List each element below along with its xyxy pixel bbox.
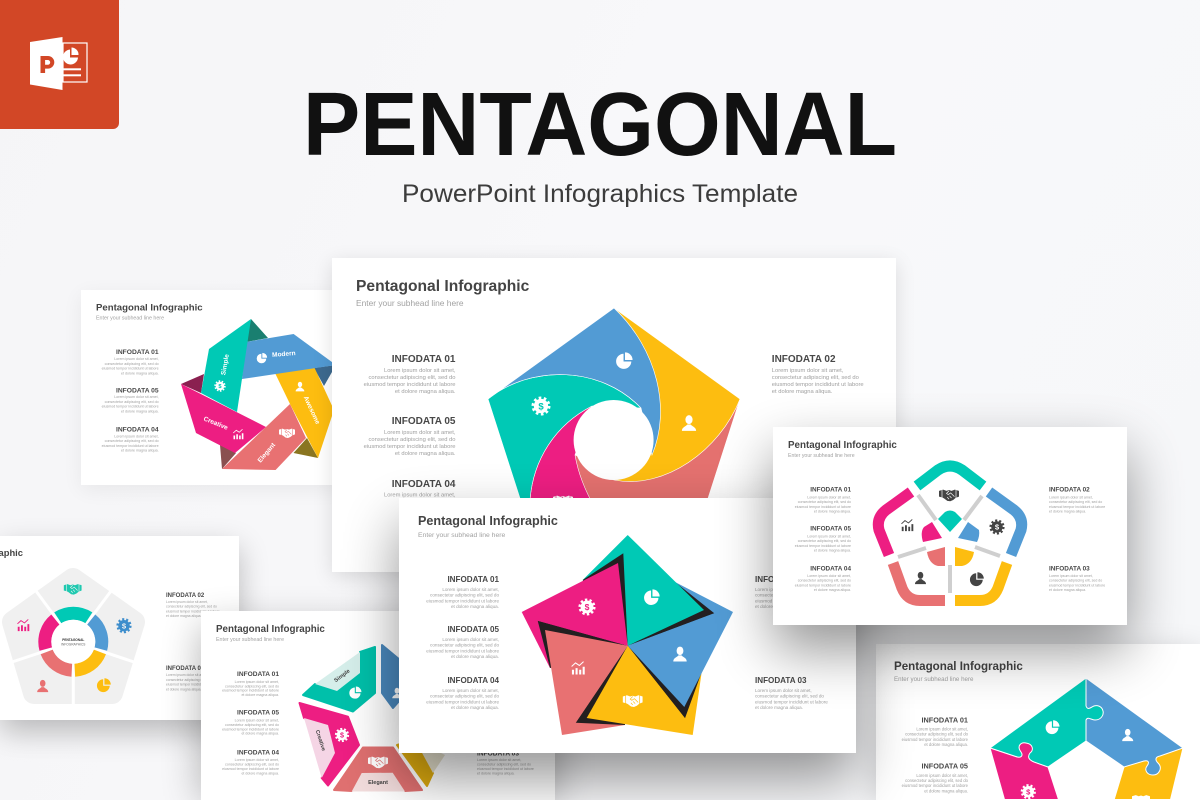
text block: infodata 05: Lorem ipsum dolor sit amet, bbox=[916, 773, 968, 778]
text block: infodata 05: eiusmod tempor incididunt ut labore bbox=[364, 444, 456, 450]
text block: infodata 05: consectetur adipiscing elit, sed do bbox=[368, 437, 456, 443]
text block: infodata 05: INFODATA 05 bbox=[392, 416, 456, 427]
text block: infodata 01: INFODATA 01 bbox=[116, 349, 159, 356]
text block: infodata 02: consectetur adipiscing elit, sed do bbox=[1049, 500, 1102, 504]
text block: infodata 03: INFODATA 03 bbox=[166, 666, 205, 672]
text block: infodata 01: et dolore magna aliqua. bbox=[241, 693, 279, 697]
text block: infodata 01 bbox=[426, 575, 499, 609]
text block: infodata 03: eiusmod tempor incididunt ut labore bbox=[166, 683, 220, 687]
text block: infodata 05 bbox=[902, 762, 969, 793]
text block: infodata 05 bbox=[426, 625, 499, 659]
chart: donut pentagon: PENTAGONAL bbox=[62, 638, 84, 642]
text block: infodata 05: Lorem ipsum dolor sit amet, bbox=[384, 430, 456, 436]
text block: infodata 01: INFODATA 01 bbox=[392, 354, 456, 365]
text block: infodata 04: Lorem ipsum dolor sit amet, bbox=[442, 688, 499, 693]
text block: infodata 01 bbox=[222, 671, 279, 697]
slide heading: Enter your subhead line here bbox=[894, 676, 974, 683]
chart: pentagon tabs: Simple bbox=[333, 668, 351, 684]
text block: infodata 05: INFODATA 05 bbox=[447, 625, 499, 634]
slide heading: Pentagonal Infographic bbox=[894, 660, 1023, 673]
slide heading: Enter your subhead line here bbox=[216, 637, 284, 643]
text block: infodata 02 bbox=[772, 354, 864, 395]
text block: infodata 02: INFODATA 02 bbox=[166, 593, 205, 599]
text block: infodata 03: et dolore magna aliqua. bbox=[1049, 588, 1086, 592]
text block: infodata 03: consectetur adipiscing elit, sed do bbox=[1049, 579, 1102, 583]
panel: ribbon star slide bbox=[81, 290, 341, 485]
text block: infodata 04: INFODATA 04 bbox=[810, 565, 851, 572]
text block: infodata 05: consectetur adipiscing elit, sed do bbox=[105, 400, 159, 404]
text block: infodata 03: INFODATA 03 bbox=[755, 676, 807, 685]
text block: infodata 03 bbox=[1049, 565, 1105, 592]
text block: infodata 04: eiusmod tempor incididunt ut labore bbox=[222, 767, 279, 771]
chart: ribbon star bbox=[181, 319, 336, 470]
text block: infodata 01: Lorem ipsum dolor sit amet, bbox=[442, 587, 499, 592]
text block: infodata 04: et dolore magna aliqua. bbox=[121, 449, 159, 453]
slide heading bbox=[894, 660, 1023, 683]
logo: PowerPoint badge bbox=[0, 0, 119, 129]
text block: infodata 05: Lorem ipsum dolor sit amet, bbox=[114, 395, 159, 399]
text block: infodata 04: eiusmod tempor incididunt ut labore bbox=[426, 699, 499, 704]
chart: swirl pentagon bbox=[488, 308, 740, 548]
text block: infodata 04: Lorem ipsum dolor sit amet, bbox=[807, 574, 851, 578]
text block: infodata 03: Lorem ipsum dolor sit amet, bbox=[477, 758, 521, 762]
text block: infodata 04: consectetur adipiscing elit, sed do bbox=[225, 763, 279, 767]
slide heading bbox=[216, 624, 325, 643]
text block: infodata 04: Lorem ipsum dolor sit amet, bbox=[384, 492, 456, 498]
text block: infodata 04: Lorem ipsum dolor sit amet, bbox=[235, 758, 279, 762]
text block: infodata 01: eiusmod tempor incididunt ut labore bbox=[795, 505, 851, 509]
text block: infodata 05 bbox=[364, 416, 456, 457]
text block: infodata 01: et dolore magna aliqua. bbox=[814, 510, 851, 514]
text block: infodata 02: eiusmod tempor incididunt ut labore bbox=[755, 598, 828, 603]
chart: pentagon tabs bbox=[300, 645, 445, 792]
slide heading: Enter your subhead line here bbox=[96, 316, 164, 322]
slide heading: Pentagonal Infographic bbox=[216, 624, 325, 635]
text block: infodata 04: eiusmod tempor incididunt ut labore bbox=[102, 444, 159, 448]
text block: infodata 05: eiusmod tempor incididunt ut labore bbox=[795, 544, 851, 548]
text block: infodata 01: Lorem ipsum dolor sit amet, bbox=[916, 726, 968, 732]
panel: puzzle pentagon slide bbox=[876, 644, 1200, 800]
panel: segmented ring slide bbox=[773, 427, 1127, 625]
chart: pinwheel pentagon bbox=[522, 535, 733, 735]
text block: infodata 03: consectetur adipiscing elit, sed do bbox=[166, 678, 217, 682]
text block: infodata 02: Lorem ipsum dolor sit amet, bbox=[1049, 496, 1093, 500]
panel: donut pentagon slide bbox=[0, 536, 239, 720]
text block: infodata 01: eiusmod tempor incididunt ut labore bbox=[364, 382, 456, 388]
text block: infodata 04 bbox=[102, 426, 159, 453]
text block: infodata 01: eiusmod tempor incididunt ut labore bbox=[222, 689, 279, 693]
text block: infodata 03 bbox=[477, 750, 534, 775]
text block: infodata 03 bbox=[166, 666, 220, 691]
text block: infodata 05: et dolore magna aliqua. bbox=[121, 409, 159, 413]
text block: infodata 01: INFODATA 01 bbox=[810, 487, 851, 494]
text block: infodata 02: consectetur adipiscing elit, sed do bbox=[772, 375, 859, 381]
text block: infodata 04: consectetur adipiscing elit, sed do bbox=[430, 694, 499, 699]
text block: infodata 02: INFODATA 02 bbox=[772, 354, 836, 365]
text block: infodata 01: Lorem ipsum dolor sit amet, bbox=[807, 496, 851, 500]
text block: infodata 05: Lorem ipsum dolor sit amet, bbox=[442, 637, 499, 642]
text block: infodata 03: et dolore magna aliqua. bbox=[166, 687, 201, 691]
text block: infodata 03: et dolore magna aliqua. bbox=[755, 705, 803, 710]
text block: infodata 01: et dolore magna aliqua. bbox=[121, 371, 159, 375]
text block: infodata 05: et dolore magna aliqua. bbox=[924, 788, 968, 793]
chart: ribbon star: Creative bbox=[202, 416, 229, 432]
chart: ribbon star: Simple bbox=[220, 353, 231, 376]
text block: infodata 05: consectetur adipiscing elit, sed do bbox=[225, 723, 279, 727]
slide heading bbox=[418, 514, 558, 539]
text block: infodata 01: Lorem ipsum dolor sit amet, bbox=[235, 680, 279, 684]
text block: infodata 02: Lorem ipsum dolor sit amet, bbox=[772, 368, 844, 374]
text block: infodata 03: consectetur adipiscing elit, sed do bbox=[755, 694, 824, 699]
chart: ribbon star: Awesome bbox=[302, 395, 321, 426]
text block: infodata 02: Lorem ipsum dolor sit amet, bbox=[755, 587, 812, 592]
chart: donut pentagon: INFOGRAPHICS bbox=[61, 642, 85, 646]
text block: infodata 04: et dolore magna aliqua. bbox=[451, 705, 499, 710]
slide heading: Pentagonal Infographic bbox=[418, 514, 558, 528]
text block: infodata 01 bbox=[364, 354, 456, 395]
text block: infodata 03: consectetur adipiscing elit, sed do bbox=[477, 763, 531, 767]
text block: infodata 05: eiusmod tempor incididunt ut labore bbox=[102, 405, 159, 409]
text block: infodata 05: consectetur adipiscing elit, sed do bbox=[905, 778, 969, 783]
panel: hexagon arrows slide bbox=[201, 611, 555, 800]
text block: infodata 05: et dolore magna aliqua. bbox=[395, 451, 456, 457]
text block: infodata 01: INFODATA 01 bbox=[922, 716, 968, 725]
text block: infodata 04: consectetur adipiscing elit, sed do bbox=[798, 579, 851, 583]
text block: infodata 03: eiusmod tempor incididunt ut labore bbox=[477, 767, 534, 771]
text block: infodata 01: consectetur adipiscing elit, sed do bbox=[430, 593, 499, 598]
text block: infodata 04 bbox=[222, 749, 279, 775]
text block: infodata 05: consectetur adipiscing elit, sed do bbox=[798, 539, 851, 543]
slide heading: Pentagonal Infographic bbox=[356, 278, 530, 295]
text block: infodata 03: Lorem ipsum dolor sit amet, bbox=[755, 688, 812, 693]
text block: infodata 02 bbox=[1049, 487, 1105, 514]
text block: infodata 05 bbox=[795, 526, 851, 553]
text block: infodata 02: consectetur adipiscing elit, sed do bbox=[166, 605, 217, 609]
text block: infodata 02: et dolore magna aliqua. bbox=[1049, 510, 1086, 514]
text block: infodata 01: consectetur adipiscing elit, sed do bbox=[368, 375, 456, 381]
chart: ribbon star: Modern bbox=[272, 350, 296, 359]
text block: infodata 01: et dolore magna aliqua. bbox=[395, 389, 456, 395]
text block: infodata 05: eiusmod tempor incididunt ut labore bbox=[426, 648, 499, 653]
text block: infodata 05: eiusmod tempor incididunt ut labore bbox=[902, 783, 969, 788]
text block: infodata 01 bbox=[902, 716, 969, 747]
text block: infodata 04 bbox=[426, 676, 499, 710]
chart: pentagon tabs: Creative bbox=[314, 729, 326, 752]
text block: infodata 03: eiusmod tempor incididunt ut labore bbox=[1049, 583, 1105, 587]
text block: infodata 01: consectetur adipiscing elit, sed do bbox=[798, 500, 851, 504]
text block: infodata 05: INFODATA 05 bbox=[922, 762, 968, 771]
text block: infodata 03: et dolore magna aliqua. bbox=[477, 771, 515, 775]
text block: infodata 04: INFODATA 04 bbox=[392, 479, 456, 490]
text block: infodata 01: eiusmod tempor incididunt ut labore bbox=[102, 367, 159, 371]
text block: infodata 05: INFODATA 05 bbox=[237, 710, 279, 717]
text block: infodata 04: INFODATA 04 bbox=[116, 426, 159, 433]
slide heading bbox=[96, 302, 203, 322]
text block: infodata 04: Lorem ipsum dolor sit amet, bbox=[114, 434, 159, 438]
text block: infodata 01: et dolore magna aliqua. bbox=[924, 742, 968, 747]
slide heading: Enter your subhead line here bbox=[788, 453, 855, 459]
slide heading: Enter your subhead line here bbox=[356, 298, 464, 308]
text block: infodata 05: et dolore magna aliqua. bbox=[241, 732, 279, 736]
chart: puzzle pentagon bbox=[990, 678, 1183, 800]
slide heading: Pentagonal Infographic bbox=[96, 302, 203, 314]
text block: infodata 02: Lorem ipsum dolor sit amet, bbox=[166, 600, 208, 604]
chart: pentagon tabs: Elegant bbox=[368, 780, 388, 786]
text block: infodata 04: INFODATA 04 bbox=[237, 749, 279, 756]
subtitle: PowerPoint Infographics Template bbox=[402, 180, 798, 208]
text block: infodata 03: INFODATA 03 bbox=[477, 750, 519, 757]
text block: infodata 05: et dolore magna aliqua. bbox=[451, 654, 499, 659]
text block: infodata 04: et dolore magna aliqua. bbox=[241, 771, 279, 775]
text block: infodata 02: eiusmod tempor incididunt ut labore bbox=[166, 609, 220, 613]
chart: segmented pentagon bbox=[878, 466, 1022, 600]
text block: infodata 02: INFODATA 02 bbox=[755, 575, 807, 584]
text block: infodata 04: consectetur adipiscing elit, sed do bbox=[105, 439, 159, 443]
text block: infodata 03: eiusmod tempor incididunt ut labore bbox=[755, 699, 828, 704]
panel: pinwheel pentagon slide bbox=[399, 498, 856, 753]
text block: infodata 03: INFODATA 03 bbox=[1049, 565, 1090, 572]
text block: infodata 02: eiusmod tempor incididunt ut labore bbox=[772, 382, 864, 388]
text block: infodata 01: et dolore magna aliqua. bbox=[451, 604, 499, 609]
slide heading bbox=[356, 278, 530, 308]
slide heading: Pentagonal Infographic bbox=[788, 440, 897, 451]
text block: infodata 05: eiusmod tempor incididunt ut labore bbox=[222, 727, 279, 731]
text block: infodata 02: INFODATA 02 bbox=[1049, 487, 1090, 494]
text block: infodata 03 bbox=[755, 676, 828, 710]
text block: infodata 05: et dolore magna aliqua. bbox=[814, 549, 851, 553]
icon: PowerPoint slide bbox=[30, 37, 87, 90]
text block: infodata 05: consectetur adipiscing elit, sed do bbox=[430, 643, 499, 648]
text block: infodata 01: consectetur adipiscing elit, sed do bbox=[105, 362, 159, 366]
chart: ribbon star: Elegant bbox=[257, 441, 278, 464]
text block: infodata 02: consectetur adipiscing elit, sed do bbox=[755, 593, 824, 598]
text block: infodata 05: INFODATA 05 bbox=[810, 526, 851, 533]
text block: infodata 05: INFODATA 05 bbox=[116, 387, 159, 394]
text block: infodata 02: et dolore magna aliqua. bbox=[772, 389, 833, 395]
slide heading: Enter your subhead line here bbox=[418, 532, 506, 539]
text block: infodata 05: Lorem ipsum dolor sit amet, bbox=[807, 534, 851, 538]
text block: infodata 04: et dolore magna aliqua. bbox=[814, 588, 851, 592]
text block: infodata 01: consectetur adipiscing elit, sed do bbox=[225, 684, 279, 688]
panel: swirl pentagon slide bbox=[332, 258, 896, 572]
text block: infodata 01: Lorem ipsum dolor sit amet, bbox=[114, 357, 159, 361]
text block: infodata 01: INFODATA 01 bbox=[447, 575, 499, 584]
text block: infodata 02: eiusmod tempor incididunt ut labore bbox=[1049, 505, 1105, 509]
text block: infodata 01 bbox=[795, 487, 851, 514]
text block: infodata 05 bbox=[102, 387, 159, 413]
text block: infodata 04 bbox=[384, 479, 456, 498]
text block: infodata 01: eiusmod tempor incididunt ut labore bbox=[902, 737, 969, 742]
text block: infodata 01: eiusmod tempor incididunt ut labore bbox=[426, 598, 499, 603]
text block: infodata 01: consectetur adipiscing elit, sed do bbox=[905, 732, 969, 737]
slide heading bbox=[788, 440, 897, 459]
text block: infodata 02: et dolore magna aliqua. bbox=[166, 614, 201, 618]
text block: infodata 04 bbox=[795, 565, 851, 592]
text block: infodata 05 bbox=[222, 710, 279, 736]
text block: infodata 01 bbox=[102, 349, 159, 375]
text block: infodata 05: Lorem ipsum dolor sit amet, bbox=[235, 718, 279, 722]
text block: infodata 04: eiusmod tempor incididunt ut labore bbox=[795, 583, 851, 587]
text block: infodata 02: et dolore magna aliqua. bbox=[755, 604, 803, 609]
chart: donut pentagon bbox=[12, 579, 134, 706]
text block: infodata 02 bbox=[166, 593, 220, 618]
text block: infodata 02 bbox=[755, 575, 828, 609]
text block: infodata 04: INFODATA 04 bbox=[447, 676, 499, 685]
text block: infodata 03: Lorem ipsum dolor sit amet, bbox=[1049, 574, 1093, 578]
text block: infodata 01: INFODATA 01 bbox=[237, 671, 279, 678]
text block: infodata 01: Lorem ipsum dolor sit amet, bbox=[384, 368, 456, 374]
text block: infodata 03: Lorem ipsum dolor sit amet, bbox=[166, 673, 208, 677]
